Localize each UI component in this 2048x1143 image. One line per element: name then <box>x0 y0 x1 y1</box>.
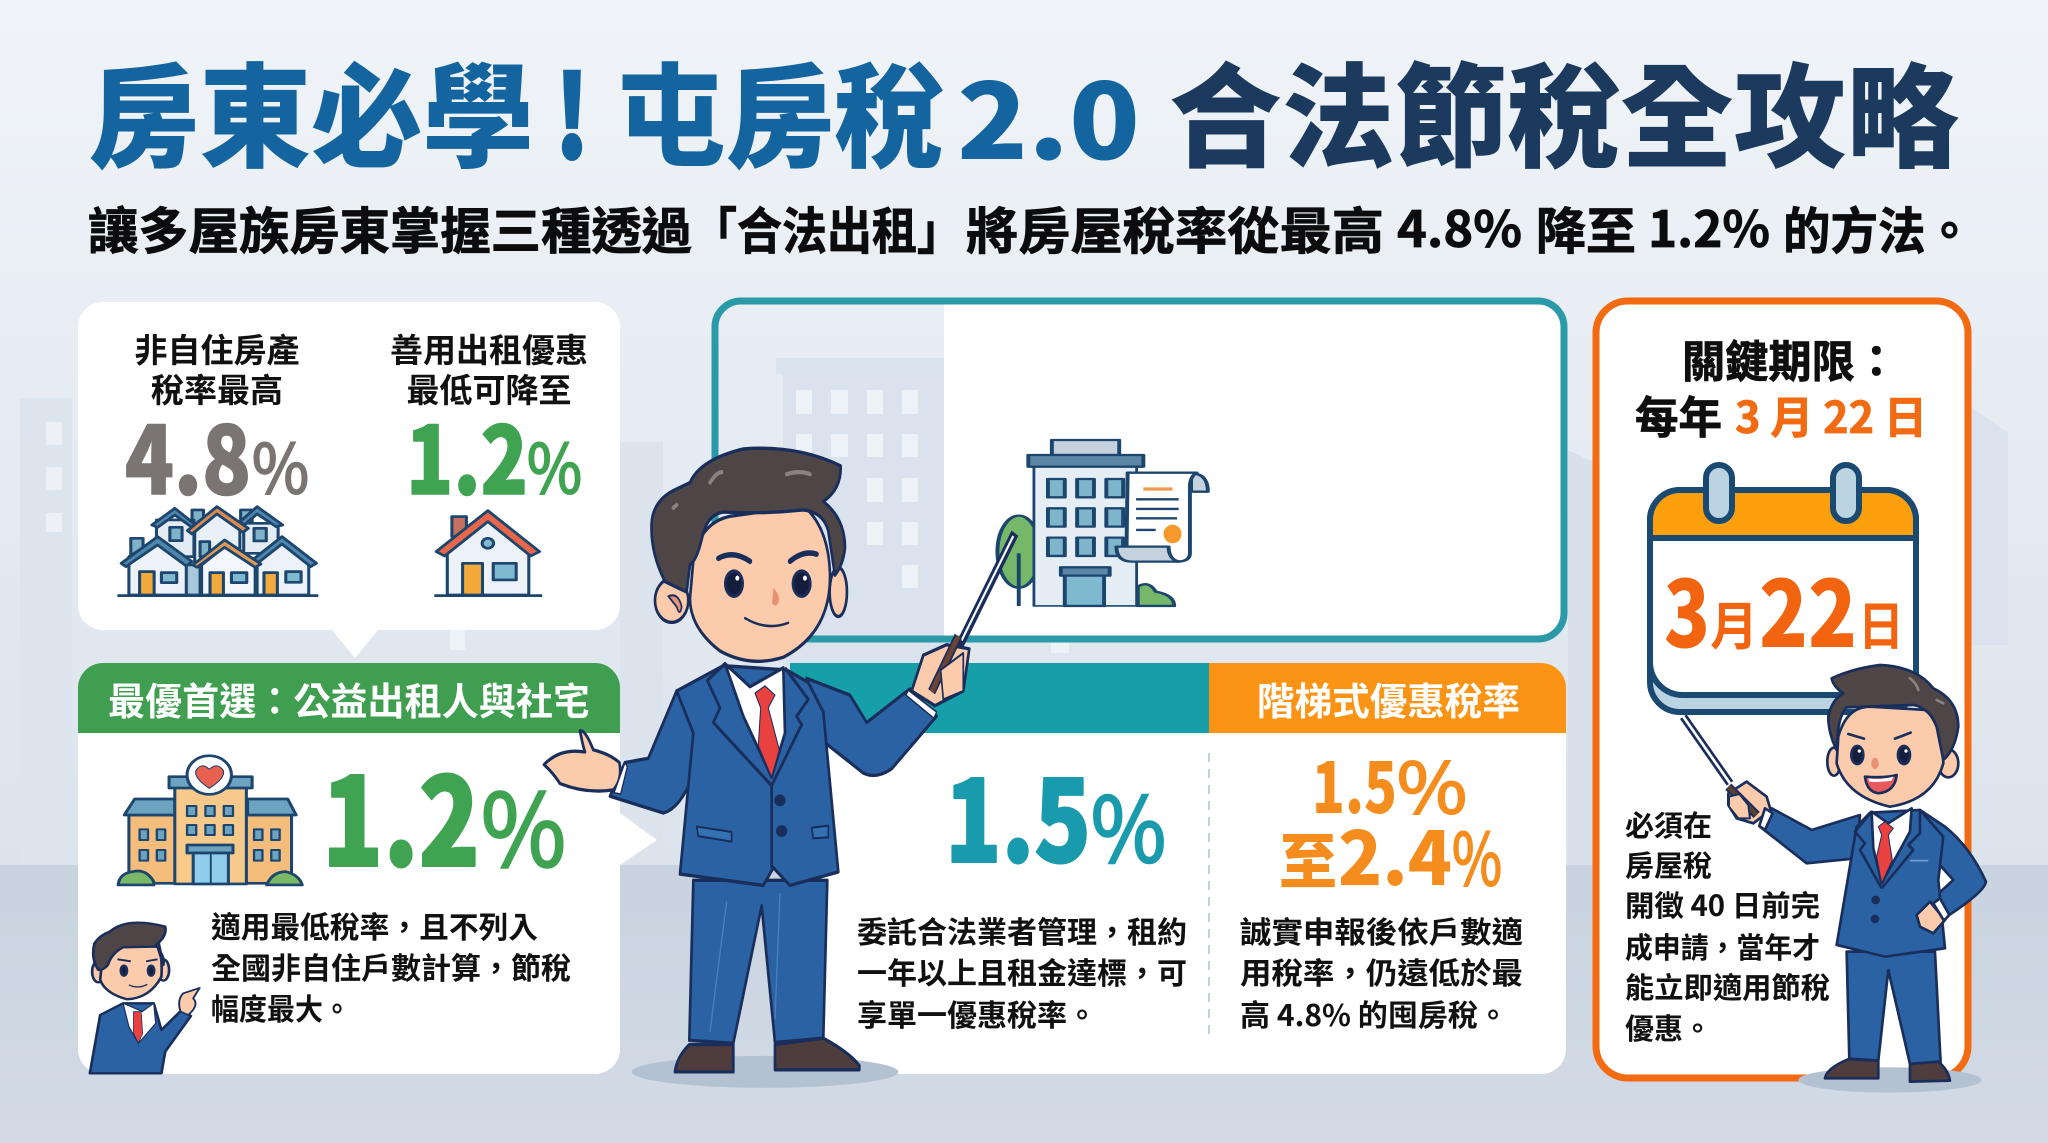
stat: 1.2% large: % <box>481 750 566 895</box>
text: lowest rate explanation: 適用最低稅率，且不列入 <box>211 903 538 947</box>
title: 合法節稅全攻略 <box>1169 27 1959 191</box>
heading: key deadline: 關鍵期限： <box>1682 326 1898 390</box>
stat: 4.8%: % <box>252 414 309 513</box>
subtitle: 的方法。 <box>1783 192 1973 264</box>
text: deadline explanation: 房屋稅 <box>1625 843 1712 885</box>
text: lowest rate explanation: 全國非自住戶數計算，節稅 <box>211 944 571 988</box>
icon: multiple houses <box>117 507 318 596</box>
text: deadline explanation: 成申請，當年才 <box>1625 925 1820 967</box>
trousers and shoes <box>675 880 859 1072</box>
title: 屯房稅 <box>616 27 944 191</box>
stat: 1.2%: 1.2 <box>406 386 528 521</box>
subtitle: 「合法出租」 <box>692 192 962 264</box>
date: 3月22日: 22 <box>1759 541 1857 674</box>
heading: every year date <box>1635 382 1927 446</box>
subtitle <box>88 190 1973 264</box>
right hand <box>906 636 969 718</box>
text: commissioned management <box>857 908 1187 1035</box>
right arm <box>807 678 937 775</box>
head <box>651 448 847 661</box>
pointer stick <box>943 533 1015 678</box>
date: 3月22日: 3 <box>1664 541 1710 674</box>
date: 3月22日: 日 <box>1858 585 1904 660</box>
subtitle: 4.8% <box>1397 190 1522 262</box>
text: deadline explanation: 優惠。 <box>1625 1006 1712 1048</box>
left hand <box>544 731 627 794</box>
text: lowest rate explanation: 幅度最大。 <box>211 985 351 1029</box>
stat: 1.5% to 2.4%: % <box>1452 801 1502 906</box>
stat: 1.5% to 2.4% <box>1279 733 1502 907</box>
figure: right presenter with pointer <box>1683 665 1986 1093</box>
stat: 1.2% large: 1.2 <box>322 725 480 902</box>
label: rental benefit <box>390 324 588 412</box>
subtitle: 讓多屋族房東掌握三種透過 <box>88 192 692 264</box>
title <box>88 27 1959 191</box>
panel: teal rental outline box <box>715 301 1564 639</box>
shirt and tie <box>697 664 828 868</box>
header: tiered rate: 階梯式優惠稅率 <box>1257 671 1520 726</box>
panel: rent management column <box>790 663 1566 1074</box>
subtitle: 降至 <box>1536 192 1636 264</box>
shadow <box>632 1056 898 1088</box>
stat: 4.8%: 4.8 <box>125 386 251 521</box>
header: tiered rate <box>1209 663 1566 733</box>
label: non-owner-occupied <box>134 324 300 412</box>
label: non-owner-occupied: 稅率最高 <box>151 364 283 412</box>
text: deadline explanation: 必須在 <box>1625 803 1712 845</box>
label: non-owner-occupied: 非自住房產 <box>134 324 300 372</box>
label: rental benefit: 最低可降至 <box>406 364 572 412</box>
stat: 1.2%: % <box>527 414 582 513</box>
label: rental benefit: 善用出租優惠 <box>390 324 588 372</box>
stat: 1.5% to 2.4%: 1.5 <box>1312 733 1397 834</box>
title: 2.0 <box>957 38 1140 189</box>
title: ! <box>555 27 589 191</box>
text: commissioned management: 享單一優惠稅率。 <box>857 991 1097 1035</box>
jacket <box>677 666 838 885</box>
icon: calendar <box>1650 465 1916 712</box>
stat: 1.5%: 1.5 <box>945 731 1091 895</box>
stat: 1.5% to 2.4%: 2.4 <box>1338 800 1452 907</box>
stat: 1.5%: % <box>1091 758 1166 888</box>
icon: building with contract <box>997 440 1208 606</box>
header: best choice: 最優首選：公益出租人與社宅 <box>108 671 590 726</box>
figure: small presenter <box>90 923 200 1073</box>
panel: key deadline <box>1596 301 1968 1078</box>
text: deadline explanation: 能立即適用節稅 <box>1625 965 1830 1007</box>
figure: main presenter <box>544 448 1015 1088</box>
heading: every year date: 3 月 22 日 <box>1735 382 1927 446</box>
subtitle: 將房屋稅率從最高 <box>966 192 1384 264</box>
text: commissioned management: 一年以上且租金達標，可 <box>857 949 1187 993</box>
subtitle: 1.2% <box>1648 190 1770 262</box>
stat: 1.5% to 2.4%: 至 <box>1279 814 1337 901</box>
left arm <box>610 691 693 813</box>
panel: best choice public-interest landlord <box>78 663 657 1074</box>
text: tiered rate: 誠實申報後依戶數適 <box>1240 908 1523 952</box>
text: tiered rate: 用稅率，仍遠低於最 <box>1240 949 1523 993</box>
icon: single house <box>434 511 542 596</box>
text: lowest rate explanation <box>211 903 571 1029</box>
text: tiered rate: 高 4.8% 的囤房稅。 <box>1240 991 1508 1035</box>
stat: 1.5% to 2.4%: % <box>1397 733 1467 834</box>
text: commissioned management: 委託合法業者管理，租約 <box>857 908 1187 952</box>
date: 3月22日: 月 <box>1710 585 1758 660</box>
icon: social housing building <box>118 756 302 885</box>
header: teal band <box>790 663 1210 733</box>
text: deadline explanation: 開徵 40 日前完 <box>1625 883 1820 925</box>
text: deadline explanation <box>1625 803 1830 1048</box>
heading: every year date: 每年 <box>1635 382 1722 446</box>
date: 3月22日 <box>1664 541 1904 674</box>
title: 房東必學 <box>88 27 534 191</box>
panel: tax rate comparison <box>78 302 620 658</box>
text: tiered rate <box>1240 908 1523 1035</box>
